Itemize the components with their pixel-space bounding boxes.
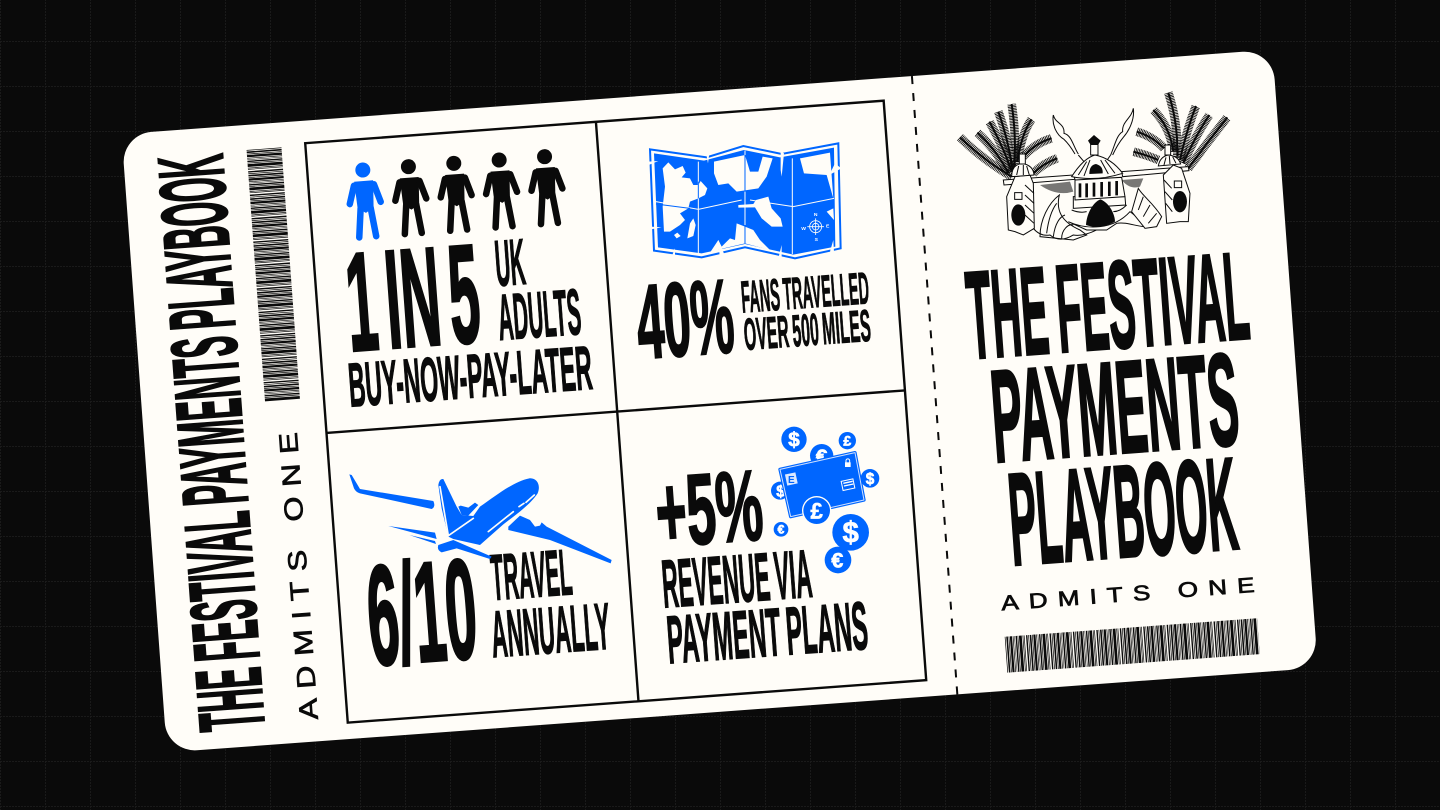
ticket: ADULTS xyxy=(495,275,583,354)
stats grid frame xyxy=(305,101,926,723)
panel: 6/10 xyxy=(343,455,627,697)
panel: 40% xyxy=(624,128,874,382)
icon: credit card and coins: $ xyxy=(866,471,875,488)
panel: 40%: 40% xyxy=(633,258,738,382)
ticket: PAYMENT PLANS xyxy=(664,588,870,678)
ticket: BUY-NOW-PAY-LATER xyxy=(346,334,594,421)
ticket: FANS TRAVELLED xyxy=(739,262,871,323)
ticket xyxy=(122,50,1318,752)
panel: +5%: REVENUE VIA xyxy=(659,536,814,623)
icon: credit card and coins: € xyxy=(778,523,785,537)
illustration: festival stage with palms and speakers xyxy=(960,93,1227,240)
icon: credit card and coins: £ xyxy=(811,498,823,523)
panel: 6/10: 6/10 xyxy=(362,530,482,696)
icon: map xyxy=(649,143,841,260)
stub barcode xyxy=(264,149,282,400)
barcode xyxy=(1006,636,1258,655)
stat: +5%: +5% xyxy=(652,449,767,569)
panel: main stub xyxy=(949,73,1273,656)
panel: 1 in 5 xyxy=(332,147,594,421)
panel: +5% xyxy=(650,419,897,679)
icon: credit card and coins: $ xyxy=(776,484,785,501)
icon: credit card and coins: € xyxy=(816,445,828,468)
admits one: ADMITS ONE xyxy=(1000,573,1265,615)
icon: plane xyxy=(349,474,612,563)
icon: map: E xyxy=(826,223,830,229)
panel: left stub xyxy=(138,147,324,734)
icon: credit card and coins: $ xyxy=(788,429,800,452)
icon: credit card and coins: £ xyxy=(843,433,851,449)
panel: 6/10: TRAVEL xyxy=(488,535,574,614)
icon: map: S xyxy=(815,237,819,243)
perforation line xyxy=(912,76,957,694)
panel: 1 in 5: 1 IN 5 xyxy=(341,215,485,381)
icon: credit card and coins xyxy=(771,427,879,573)
ticket: ANNUALLY xyxy=(488,589,613,671)
icon: credit card and coins: E xyxy=(788,475,795,486)
ticket: OVER 500 MILES xyxy=(742,300,872,360)
icon: map: W xyxy=(801,226,806,232)
stub admits one: ADMITS ONE xyxy=(272,422,324,721)
panel: 1 in 5: UK xyxy=(492,225,528,300)
icon: five people xyxy=(347,148,565,238)
icon: map: N xyxy=(814,212,818,218)
icon: credit card and coins: € xyxy=(831,549,843,573)
icon: credit card and coins: $ xyxy=(843,517,859,550)
